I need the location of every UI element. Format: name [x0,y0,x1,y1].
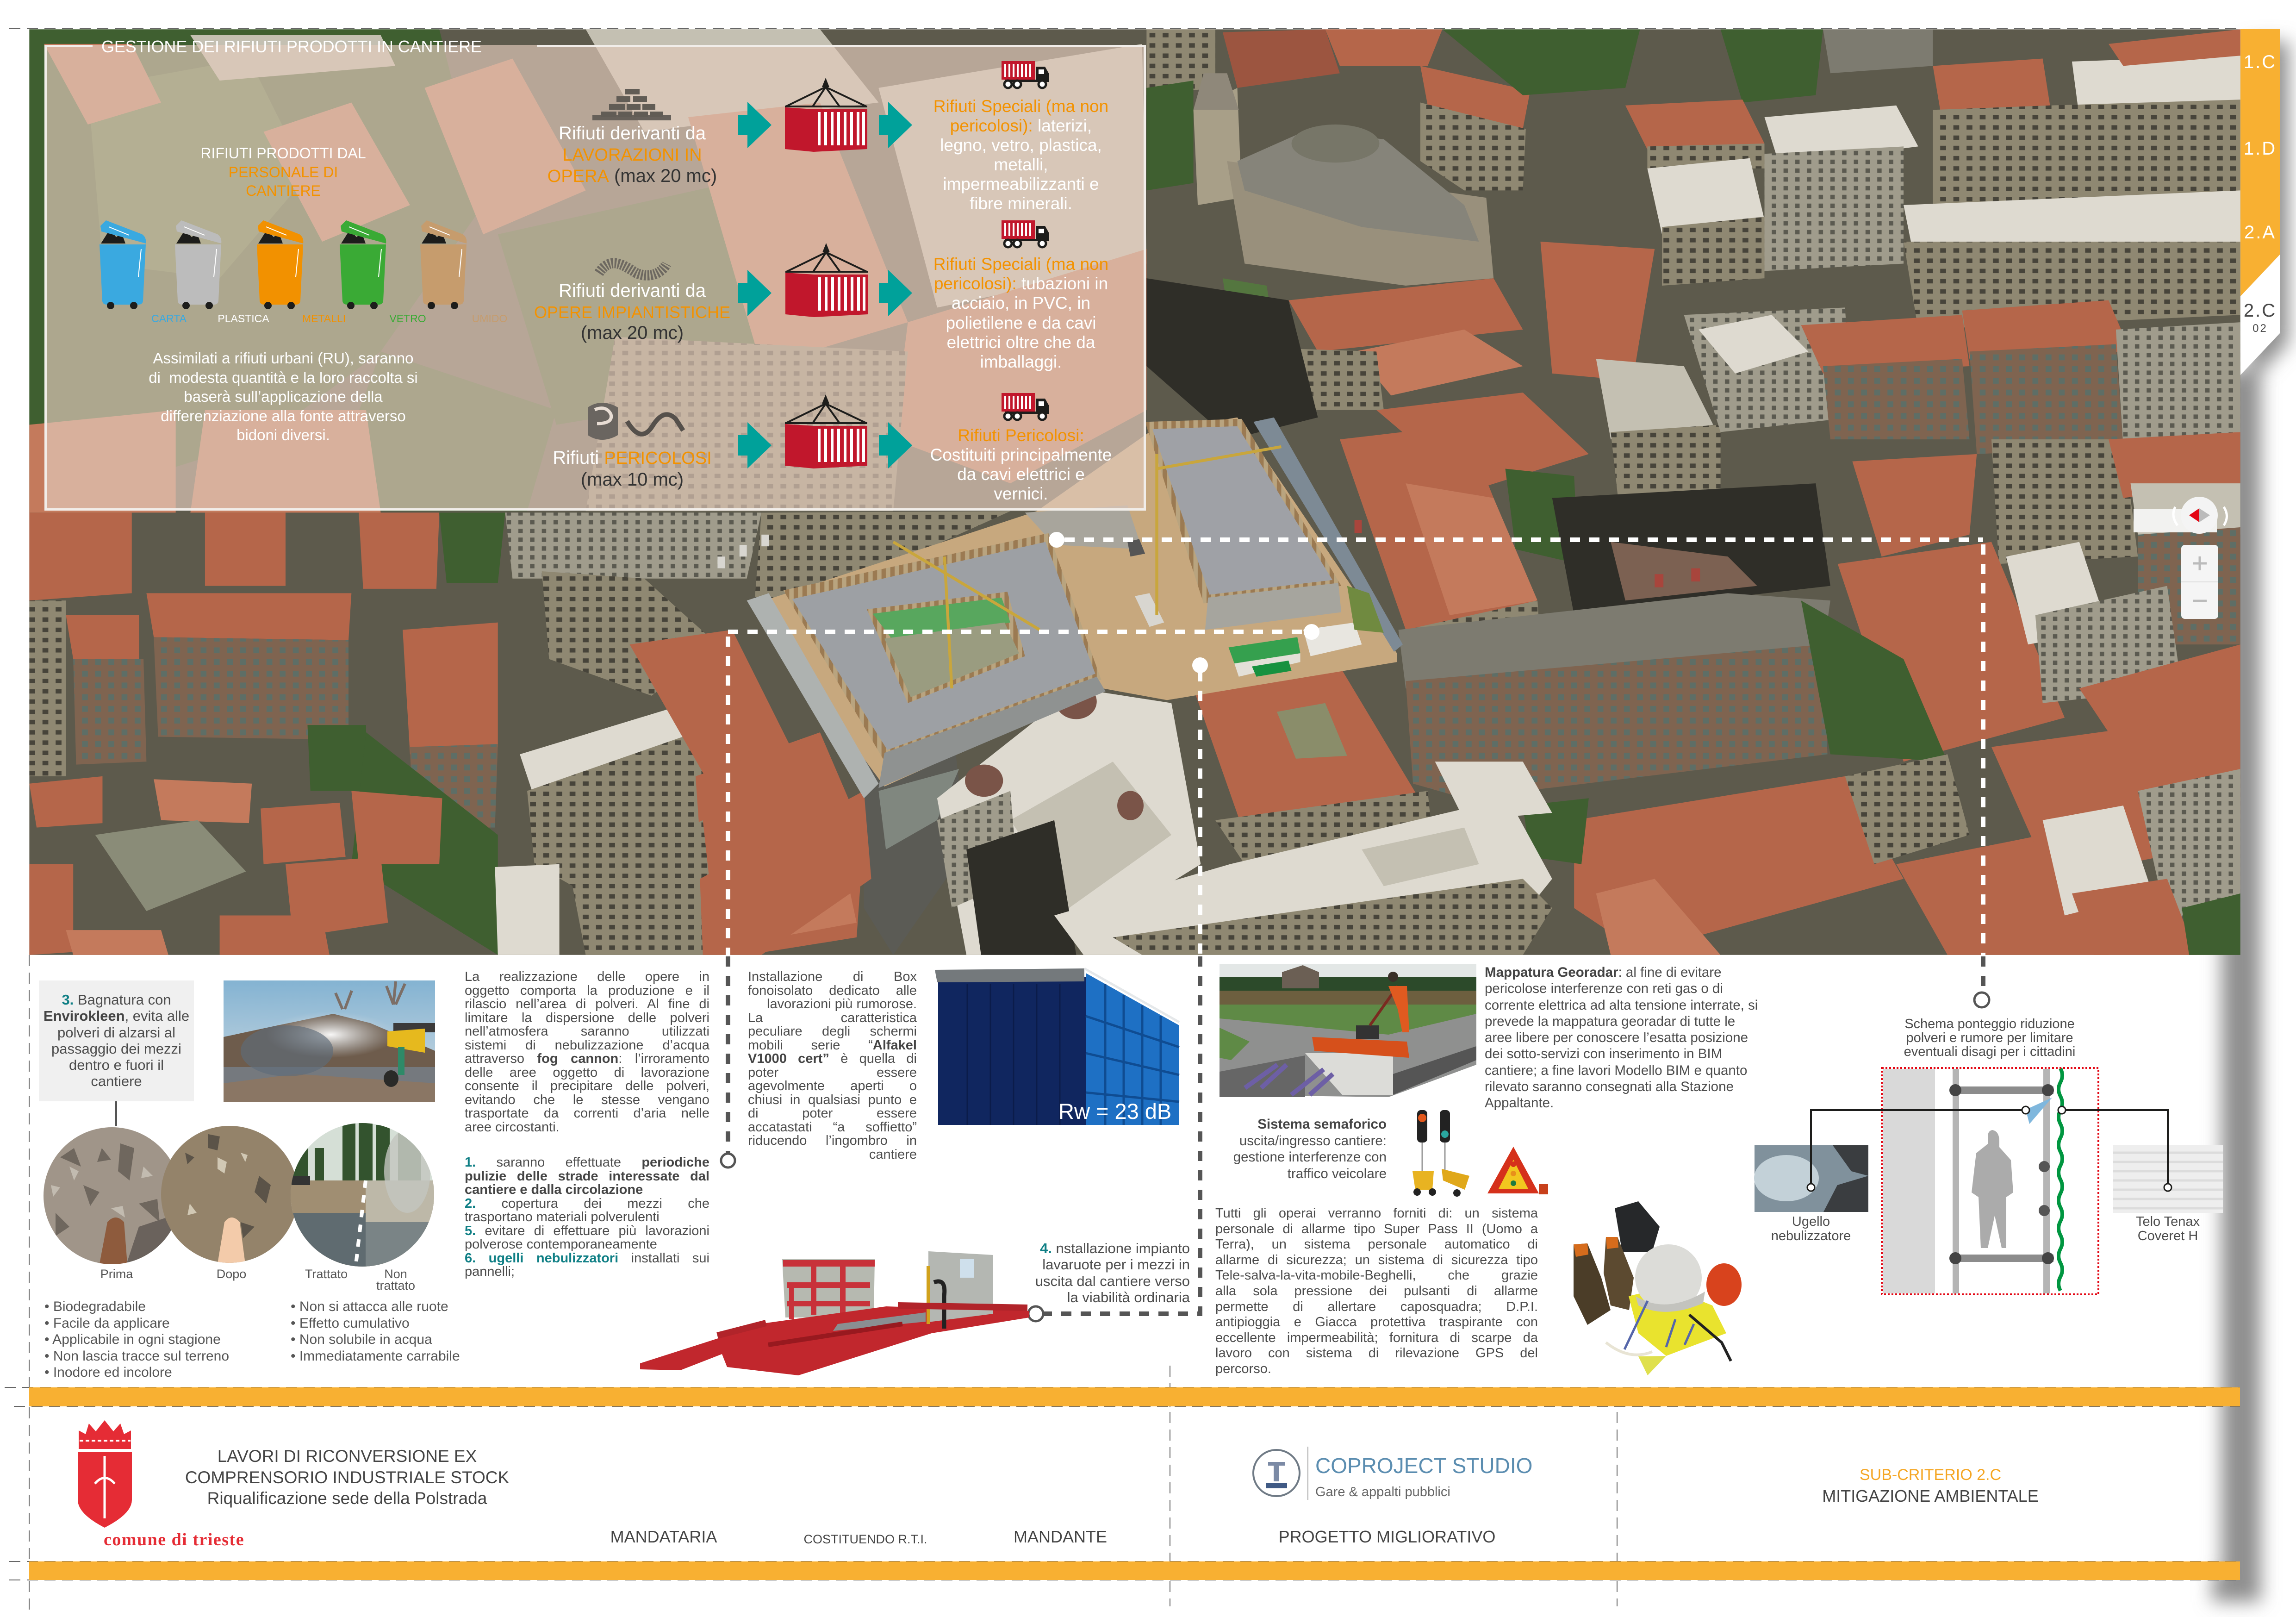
text: tab labels: 2.C [2244,300,2277,321]
text: traffic light system: Sistema semaforico [1257,1117,1387,1132]
bin labels: METALLI [302,312,346,325]
footer: project title [139,1446,555,1509]
under panel: trees and houses [29,29,483,512]
icon: warning triangle [1487,1147,1548,1194]
text: rifiuti speciali 1 [905,97,1137,213]
bin labels: PLASTICA [218,312,269,325]
text: traffic light system: uscita/ingresso cantiere: [1239,1133,1387,1148]
logo: comune di trieste crest [78,1420,132,1528]
text: dust mitigation: aree circostanti. [465,1119,560,1134]
dashed connectors over the aerial [728,540,1983,955]
label: ugello: nebulizzatore [1771,1229,1851,1243]
text: rifiuti pericolosi destination: Rifiuti Pericolosi: [958,426,1084,445]
map zoom controls [2181,545,2218,619]
text: rifiuti speciali 2: imballaggi. [980,352,1062,371]
photo: noise barrier box [935,968,1179,1125]
text: rifiuti pericolosi destination: da cavi elettrici e [957,465,1085,484]
text: sound insulated box: V1000 cert” è quella di [748,1051,917,1066]
text: rifiuti speciali 1: impermeabilizzanti e [943,175,1099,194]
construction site [751,418,1397,787]
text: dust mitigation: consente il precipitare delle polveri, [465,1079,709,1093]
text: traffic light system: traffico veicolare [1288,1166,1387,1181]
title: GESTIONE DEI RIFIUTI PRODOTTI IN CANTIERE [101,37,482,56]
text: rifiuti speciali 2: pericolosi): tubazioni in [934,274,1108,293]
bin labels: VETRO [389,312,426,325]
text: traffic light system [1201,1116,1387,1182]
text: workers equipment: lavoro con sistema di rilevazione GPS del [1215,1346,1538,1361]
text: rifiuti speciali 1: pericolosi): laterizi, [950,116,1092,135]
site neighbours [754,511,1010,608]
diagram: scaffold scheme [1882,1068,2098,1294]
text: sound insulated box: di poter essere [748,1106,917,1121]
text: wheel wash: uscita dal cantiere verso [1035,1273,1190,1289]
circle captions [69,1266,440,1294]
text: opere impiantistiche: (max 20 mc) [581,323,684,343]
text: lavorazioni in opera: OPERA (max 20 mc) [548,166,717,186]
label: telo [2098,1215,2237,1243]
footer: sub-criterio: SUB-CRITERIO 2.C [1860,1466,2001,1484]
text: wheel wash: lavaruote per i mezzi in [1042,1256,1190,1273]
icon: waste bins [100,220,467,309]
callout: Envirokleen: polveri di alzarsi al [57,1024,175,1041]
icon: arrows row 1 [738,102,912,148]
text: rifiuti pericolosi: Rifiuti PERICOLOSI [553,448,712,468]
callout: Envirokleen: cantiere [91,1073,142,1089]
map compass [2134,497,2227,534]
bin labels [44,310,507,327]
text: rifiuti speciali 2: elettrici oltre che da [947,333,1095,352]
icon: trucks [1002,61,1049,420]
text: workers equipment: allarme di sicurezza; un sistema di sicurezza tipo [1215,1253,1538,1267]
text: dust mitigation: limitare la dispersione delle polveri [465,1010,709,1025]
text: georadar: Appaltante. [1485,1095,1554,1111]
circle captions: Prima [100,1267,133,1281]
text: sound insulated box: poter essere [748,1065,917,1080]
text: traffic light system: gestione interferenze con [1233,1149,1387,1165]
upper right [1146,29,1215,95]
footer: mitigazione ambientale: MITIGAZIONE AMBIENTALE [1822,1486,2039,1505]
footer: progetto migliorativo: PROGETTO MIGLIORATIVO [1279,1527,1495,1546]
text: sound insulated box: agevolmente aperti o [748,1079,917,1093]
text: sound insulated box: fonoisolato dedicato alle [748,983,917,998]
text: scaffold caption [1874,1017,2105,1059]
text: dust mitigation: delle aree oggetto di lavorazione [465,1065,709,1080]
text: dust mitigation: attraverso fog cannon: l’irroramento [465,1051,709,1066]
callout: Envirokleen: passaggio dei mezzi [51,1041,181,1057]
orange band 1 [29,1387,2240,1406]
text: rifiuti speciali 2: acciaio, in PVC, in [952,293,1090,312]
text: workers equipment: eccellente impermeabilità; fornitura di scarpe da [1215,1330,1538,1345]
list: properties left [44,1299,229,1380]
text: numbered measures: 6. ugelli nebulizzatori installati sui [465,1251,709,1266]
text: lavorazioni in opera: LAVORAZIONI IN [562,145,702,165]
text: sound insulated box: mobili serie “Alfakel [748,1038,917,1053]
illustration: protective equipment [1574,1201,1742,1375]
text: georadar: prevede la mappatura georadar di tutte le [1485,1014,1735,1029]
text: wheel wash: la viabilità ordinaria [1067,1289,1190,1305]
footer: project title: COMPRENSORIO INDUSTRIALE STOCK [185,1467,509,1487]
label: telo: Telo Tenax [2136,1214,2200,1229]
text: numbered measures [465,1156,709,1279]
dashed connectors over the white area [728,956,1983,1314]
circle captions: Dopo [217,1267,246,1281]
mid right [1146,278,1318,439]
footer: project title: Riqualificazione sede della Polstrada [207,1489,487,1508]
text: workers equipment: Tutti gli operai verranno forniti di: un sistema [1215,1206,1538,1221]
list: properties right: • Effetto cumulativo [291,1316,410,1330]
text: scaffold caption: polveri e rumore per limitare [1906,1030,2073,1045]
bin labels: CARTA [151,312,187,325]
icon: arrows row 2 [738,270,912,316]
circle captions: trattato [376,1279,415,1292]
panel: gestione dei rifiuti [44,45,1146,511]
text: georadar: rilevato saranno consegnati alla Stazione [1485,1079,1734,1094]
callout: Envirokleen: Envirokleen, evita alle [44,1008,189,1024]
footer: costituendo: COSTITUENDO R.T.I. [803,1532,927,1546]
text: tab labels [2240,46,2280,338]
text: dust mitigation: oggetto comporta la produzione e il [465,983,709,998]
photo: treated road [287,1120,440,1273]
footer: mandante: MANDANTE [1014,1527,1107,1546]
red courtyard roof [1194,667,1428,835]
text: rifiuti pericolosi destination: Costituiti principalmente [930,445,1112,464]
text: sound insulated box: Installazione di Box [748,969,917,984]
text: numbered measures: 5. evitare di effettuare più lavorazioni [465,1223,709,1238]
photo: fog cannon [224,980,435,1102]
text: rifiuti speciali 1: legno, vetro, plastica, [940,136,1102,155]
list: properties right: • Non si attacca alle ruote [291,1299,448,1314]
text: workers equipment: alla sola pressione dei pulsanti di allarme [1215,1284,1538,1299]
footer: coproject tagline: Gare & appalti pubblici [1315,1485,1450,1499]
cars [717,535,769,568]
text: workers equipment: percorso. [1215,1361,1271,1376]
text: numbered measures: trasportano materiali polverulenti [465,1210,660,1224]
list: properties right: • Non solubile in acqua [291,1332,432,1347]
text: dust mitigation: nell’atmosfera saranno utilizzati [465,1024,709,1039]
text: workers equipment: Tele-salva-la-vita-mobile-Beghelli, che grazie [1215,1268,1538,1283]
photo: tenax fabric [2113,1145,2223,1213]
text: rifiuti speciali 1: Rifiuti Speciali (ma non [933,97,1108,116]
footer: mandataria: MANDATARIA [610,1527,717,1546]
text: opere impiantistiche: Rifiuti derivanti da [559,281,706,301]
text: rifiuti speciali 2 [905,255,1137,372]
text: georadar: Mappatura Georadar: al fine di evitare [1485,965,1722,980]
list: properties left: • Inodore ed incolore [44,1365,172,1380]
text: assimilati: bidoni diversi. [236,426,330,443]
list: properties left: • Facile da applicare [44,1316,170,1330]
text: tab labels: 1.D [2244,138,2277,159]
photo: before treatment [42,1125,180,1268]
upper right blocks [1625,100,1765,150]
footer: project title: LAVORI DI RICONVERSIONE EX [218,1447,477,1466]
label: ugello [1742,1215,1880,1243]
circle captions: Trattato [305,1267,348,1281]
text: georadar: dei sotto-servizi con inserimento in BIM [1485,1046,1722,1061]
bin labels: UMIDO [472,312,507,325]
text: sound insulated box: La caratteristica [748,1010,917,1025]
text: sound insulated box: accatastati “a soffietto” [748,1119,917,1134]
photo: after treatment [160,1125,299,1268]
text: workers equipment: Terra), un sistema personale automatico di [1215,1237,1538,1252]
text: rifiuti pericolosi: (max 10 mc) [581,469,684,490]
lower right [1574,776,1904,952]
text: numbered measures: pulizie delle strade interessate dal [465,1168,709,1183]
text: numbered measures: pannelli; [465,1264,515,1279]
text: georadar: pericolose interferenze con reti gas o di [1485,981,1723,996]
text: numbered measures: 2. copertura dei mezzi che [465,1196,709,1211]
long white building [1054,798,1552,955]
text: georadar: corrente elettrica ad alta tensione interrate, si [1485,998,1758,1013]
text: assimilati: di modesta quantità e la loro raccolta si [149,368,418,386]
footer: coproject logotype: COPROJECT STUDIO [1315,1454,1532,1478]
footer: comune di trieste wordmark: comune di trieste [104,1530,244,1549]
orange band 2 [29,1561,2240,1580]
text: sound insulated box: riducendo l’ingombro in [748,1133,917,1148]
icon: containers [785,78,868,468]
open connector circles [721,993,1989,1321]
text: lavorazioni in opera [493,123,771,187]
icon: bricks [592,89,671,120]
text: dust mitigation: trasportate da correnti d’aria nelle [465,1106,709,1121]
leader lines [1807,1106,2172,1191]
text: sound insulated box: cantiere [869,1147,917,1162]
text: dust mitigation: La realizzazione delle opere in [465,969,709,984]
list: properties left: • Applicabile in ogni stagione [44,1332,221,1347]
left lower [29,512,132,600]
text: wheel wash: 4. nstallazione impianto [1040,1240,1190,1256]
text: numbered measures: polverose contemporaneamente [465,1237,657,1252]
text: sound insulated box: chiusi in qualsiasi punto e [748,1093,917,1107]
text: rifiuti speciali 2: polietilene e da cavi [946,313,1096,332]
text: workers equipment: personale di allarme tipo Super Pass II (Uomo a [1215,1222,1538,1236]
logo: coproject studio mark [1253,1447,1308,1500]
text: georadar [1485,964,1758,1111]
white central block [937,688,1201,955]
label: telo: Coveret H [2138,1229,2198,1243]
text: dust mitigation: evitando che le stesse vengano [465,1093,709,1107]
illustration: wheel wash [640,1251,1029,1375]
list: properties right [291,1299,460,1364]
icon: arrows row 3 [738,422,912,468]
text: rifiuti speciali 1: metalli, [994,155,1048,174]
text: dust mitigation: rilascio nell’area di polveri. Al fine di [465,997,709,1011]
text: rifiuti prodotti dal personale: RIFIUTI PRODOTTI DAL [200,145,366,162]
text: opere impiantistiche: OPERE IMPIANTISTICHE [534,303,730,321]
text: dust mitigation [465,970,709,1134]
text: lavorazioni in opera: Rifiuti derivanti da [559,123,706,144]
circle captions: Non [384,1267,407,1281]
callout: Envirokleen: dentro e fuori il [69,1057,164,1073]
text: numbered measures: cantiere e dalla circolazione [465,1182,643,1197]
text: scaffold caption: eventuali disagi per i cittadini [1904,1044,2075,1059]
text: assimilati: differenziazione alla fonte attraverso [161,407,406,424]
text: rifiuti pericolosi destination [905,426,1137,504]
church [1194,88,1242,205]
panel border [45,46,1145,509]
aerial photograph of the construction site [29,29,2240,955]
text: rifiuti pericolosi destination: vernici. [994,484,1048,503]
list: properties left: • Biodegradabile [44,1299,146,1314]
list: properties right: • Immediatamente carrabile [291,1348,460,1364]
brown long building [1399,593,1830,703]
text: rifiuti speciali 2: Rifiuti Speciali (ma non [933,255,1108,274]
text: rifiuti prodotti dal personale [98,144,468,200]
panel icons and frame [44,45,1146,511]
text: rifiuti prodotti dal personale: PERSONALE DI [229,164,338,181]
text: sound insulated box: peculiare degli schermi [748,1024,917,1039]
text: assimilati: Assimilati a rifiuti urbani (RU), saranno [153,350,414,367]
photo: georadar survey [1220,964,1476,1097]
connector line to gray box [115,1101,117,1126]
text: scaffold caption: Schema ponteggio riduzione [1904,1017,2075,1031]
text: rifiuti prodotti dal personale: CANTIERE [246,182,321,199]
side tabs [2240,29,2280,375]
icon: corrugated pipe [599,263,666,275]
text: tab labels: 02 [2252,322,2268,335]
text: rifiuti speciali 1: fibre minerali. [970,194,1072,213]
label: Rw value: Rw = 23 dB [1058,1099,1171,1124]
text: numbered measures: 1. saranno effettuate periodiche [465,1155,709,1170]
text: dust mitigation: sistemi di nebulizzazione d’acqua [465,1038,709,1053]
text: workers equipment [1215,1206,1538,1377]
text: rifiuti pericolosi [493,447,771,490]
text: assimilati: baserà sull’applicazione della [184,388,383,405]
callout: Envirokleen: 3. Bagnatura con [62,992,171,1008]
text: workers equipment: antipioggia e Giacca protettiva traspirante con [1215,1315,1538,1330]
text: georadar: aree libere per conoscere l’esatta posizione [1485,1030,1748,1045]
text: sound insulated box: lavorazioni più rumorose. [767,997,917,1011]
connector nodes [1049,532,1319,673]
icon: traffic lights [1412,1110,1469,1197]
callout: Envirokleen [39,980,194,1101]
text: georadar: cantiere; a fine lavori Modello BIM e quanto [1485,1063,1747,1078]
list: properties left: • Non lascia tracce sul terreno [44,1348,229,1364]
icon: bucket and cable [588,403,683,440]
text: tab labels: 2.A [2244,222,2276,243]
photo: nozzle spray [1754,1145,1868,1212]
text: assimilati [98,349,468,444]
text: workers equipment: permette di allertare caposquadra; D.P.I. [1215,1299,1538,1314]
text: tab labels: 1.C [2244,52,2277,72]
label: ugello: Ugello [1792,1214,1830,1229]
text: opere impiantistiche [493,281,771,343]
text: sound insulated box [748,970,917,1161]
text: wheel wash [1005,1240,1190,1306]
